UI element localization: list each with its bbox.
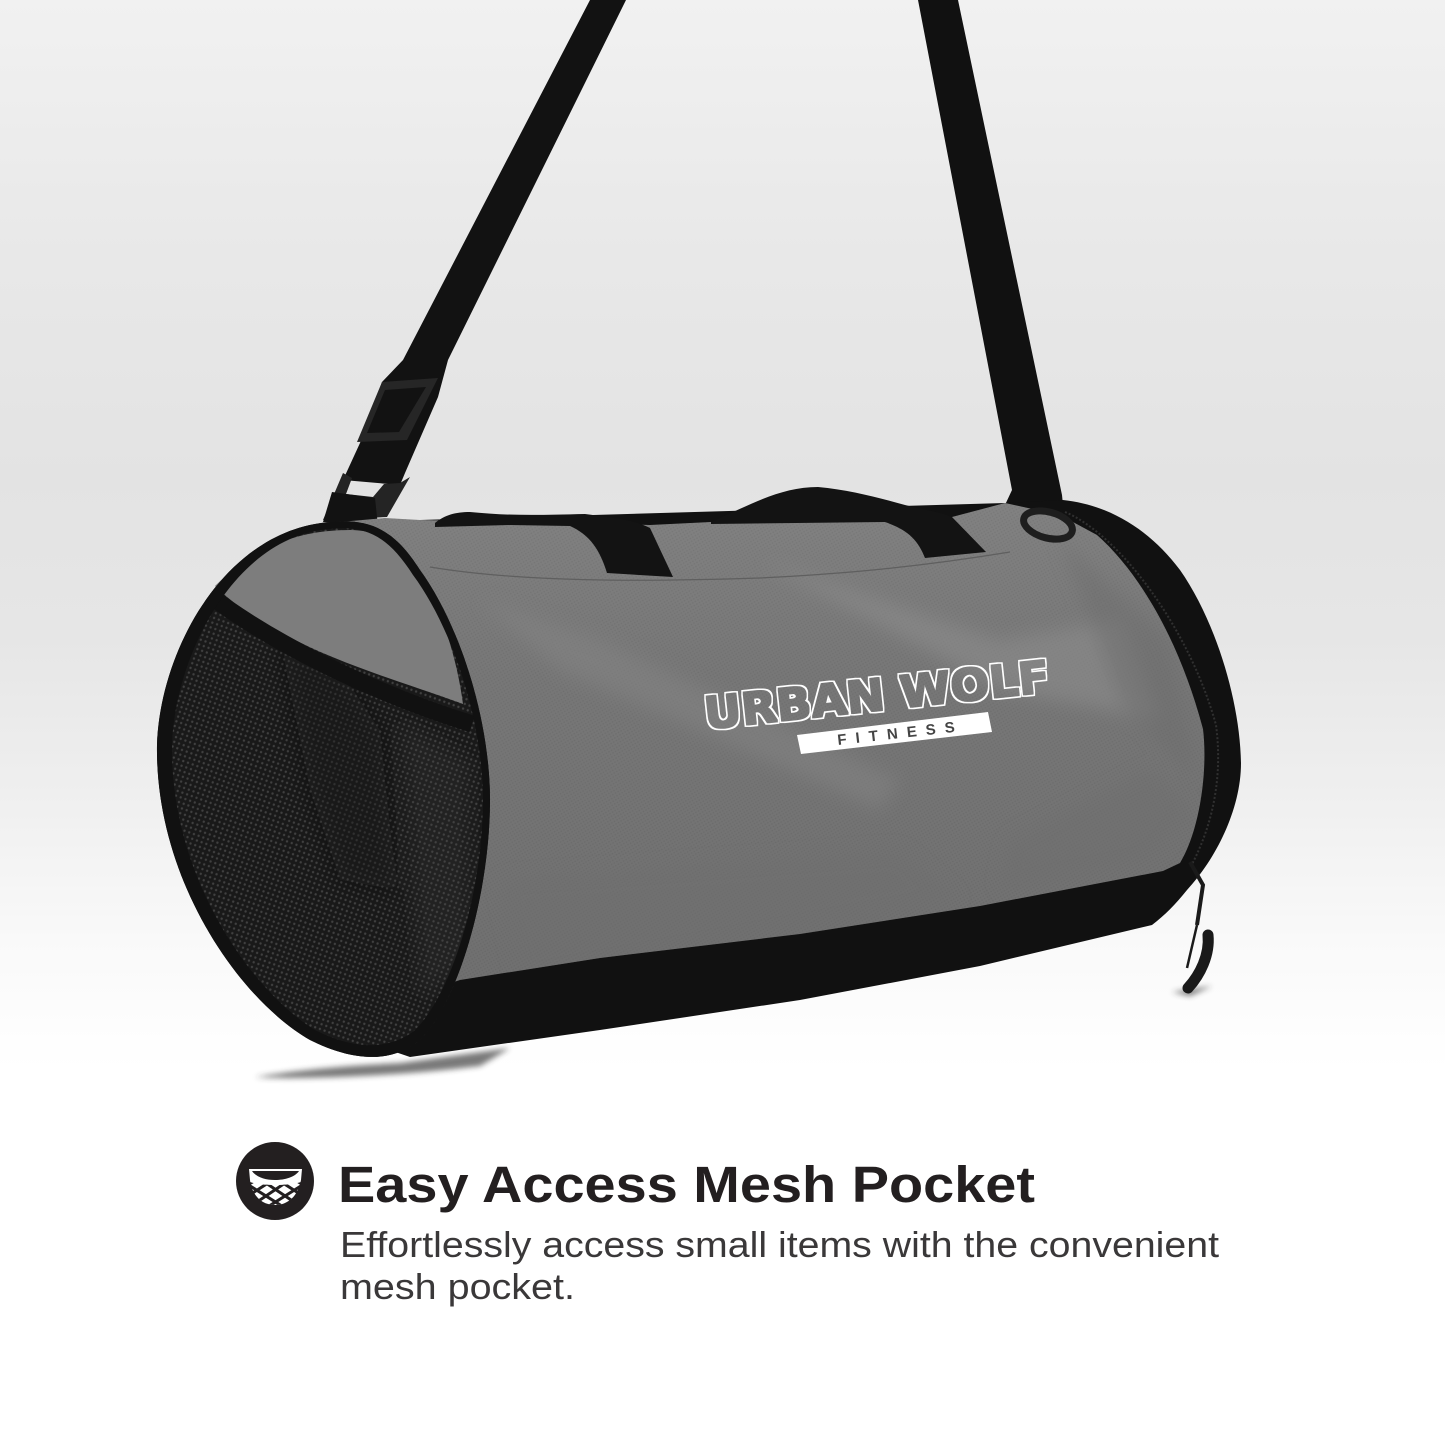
shoulder strap: left (323, 0, 626, 526)
mesh pocket (157, 521, 490, 1057)
logo bar (797, 712, 992, 754)
title: Easy Access Mesh Pocket (338, 1156, 1035, 1213)
strap ring (1020, 506, 1076, 544)
strap buckle (357, 378, 438, 442)
logo: Urban Wolf Fitness (702, 652, 1052, 754)
grey fabric body (346, 503, 1204, 982)
black base and zipper band (360, 500, 1241, 1057)
fabric folds (532, 592, 1131, 968)
left end panel (157, 521, 490, 1057)
pocket binding (205, 592, 472, 724)
strap loop (323, 492, 378, 526)
logo wordmark: URBAN WOLF (702, 652, 1052, 740)
upper grey panel (215, 530, 463, 704)
description: mesh pocket. (340, 1266, 575, 1307)
shoulder strap: right (918, 0, 1063, 505)
carry handle: right (711, 487, 986, 558)
d-ring (323, 473, 410, 520)
duffel bag (157, 0, 1241, 1057)
zipper teeth (1065, 512, 1218, 868)
seam (430, 552, 1010, 580)
logo subtext: FITNESS (837, 719, 956, 749)
description (340, 1224, 1219, 1307)
zipper pull (1187, 862, 1208, 988)
icon: mesh pocket (236, 1142, 314, 1220)
floor shadow (255, 986, 1212, 1078)
rim (157, 521, 490, 1057)
carry handle: left (435, 512, 673, 577)
description: Effortlessly access small items with the convenient (340, 1224, 1219, 1265)
